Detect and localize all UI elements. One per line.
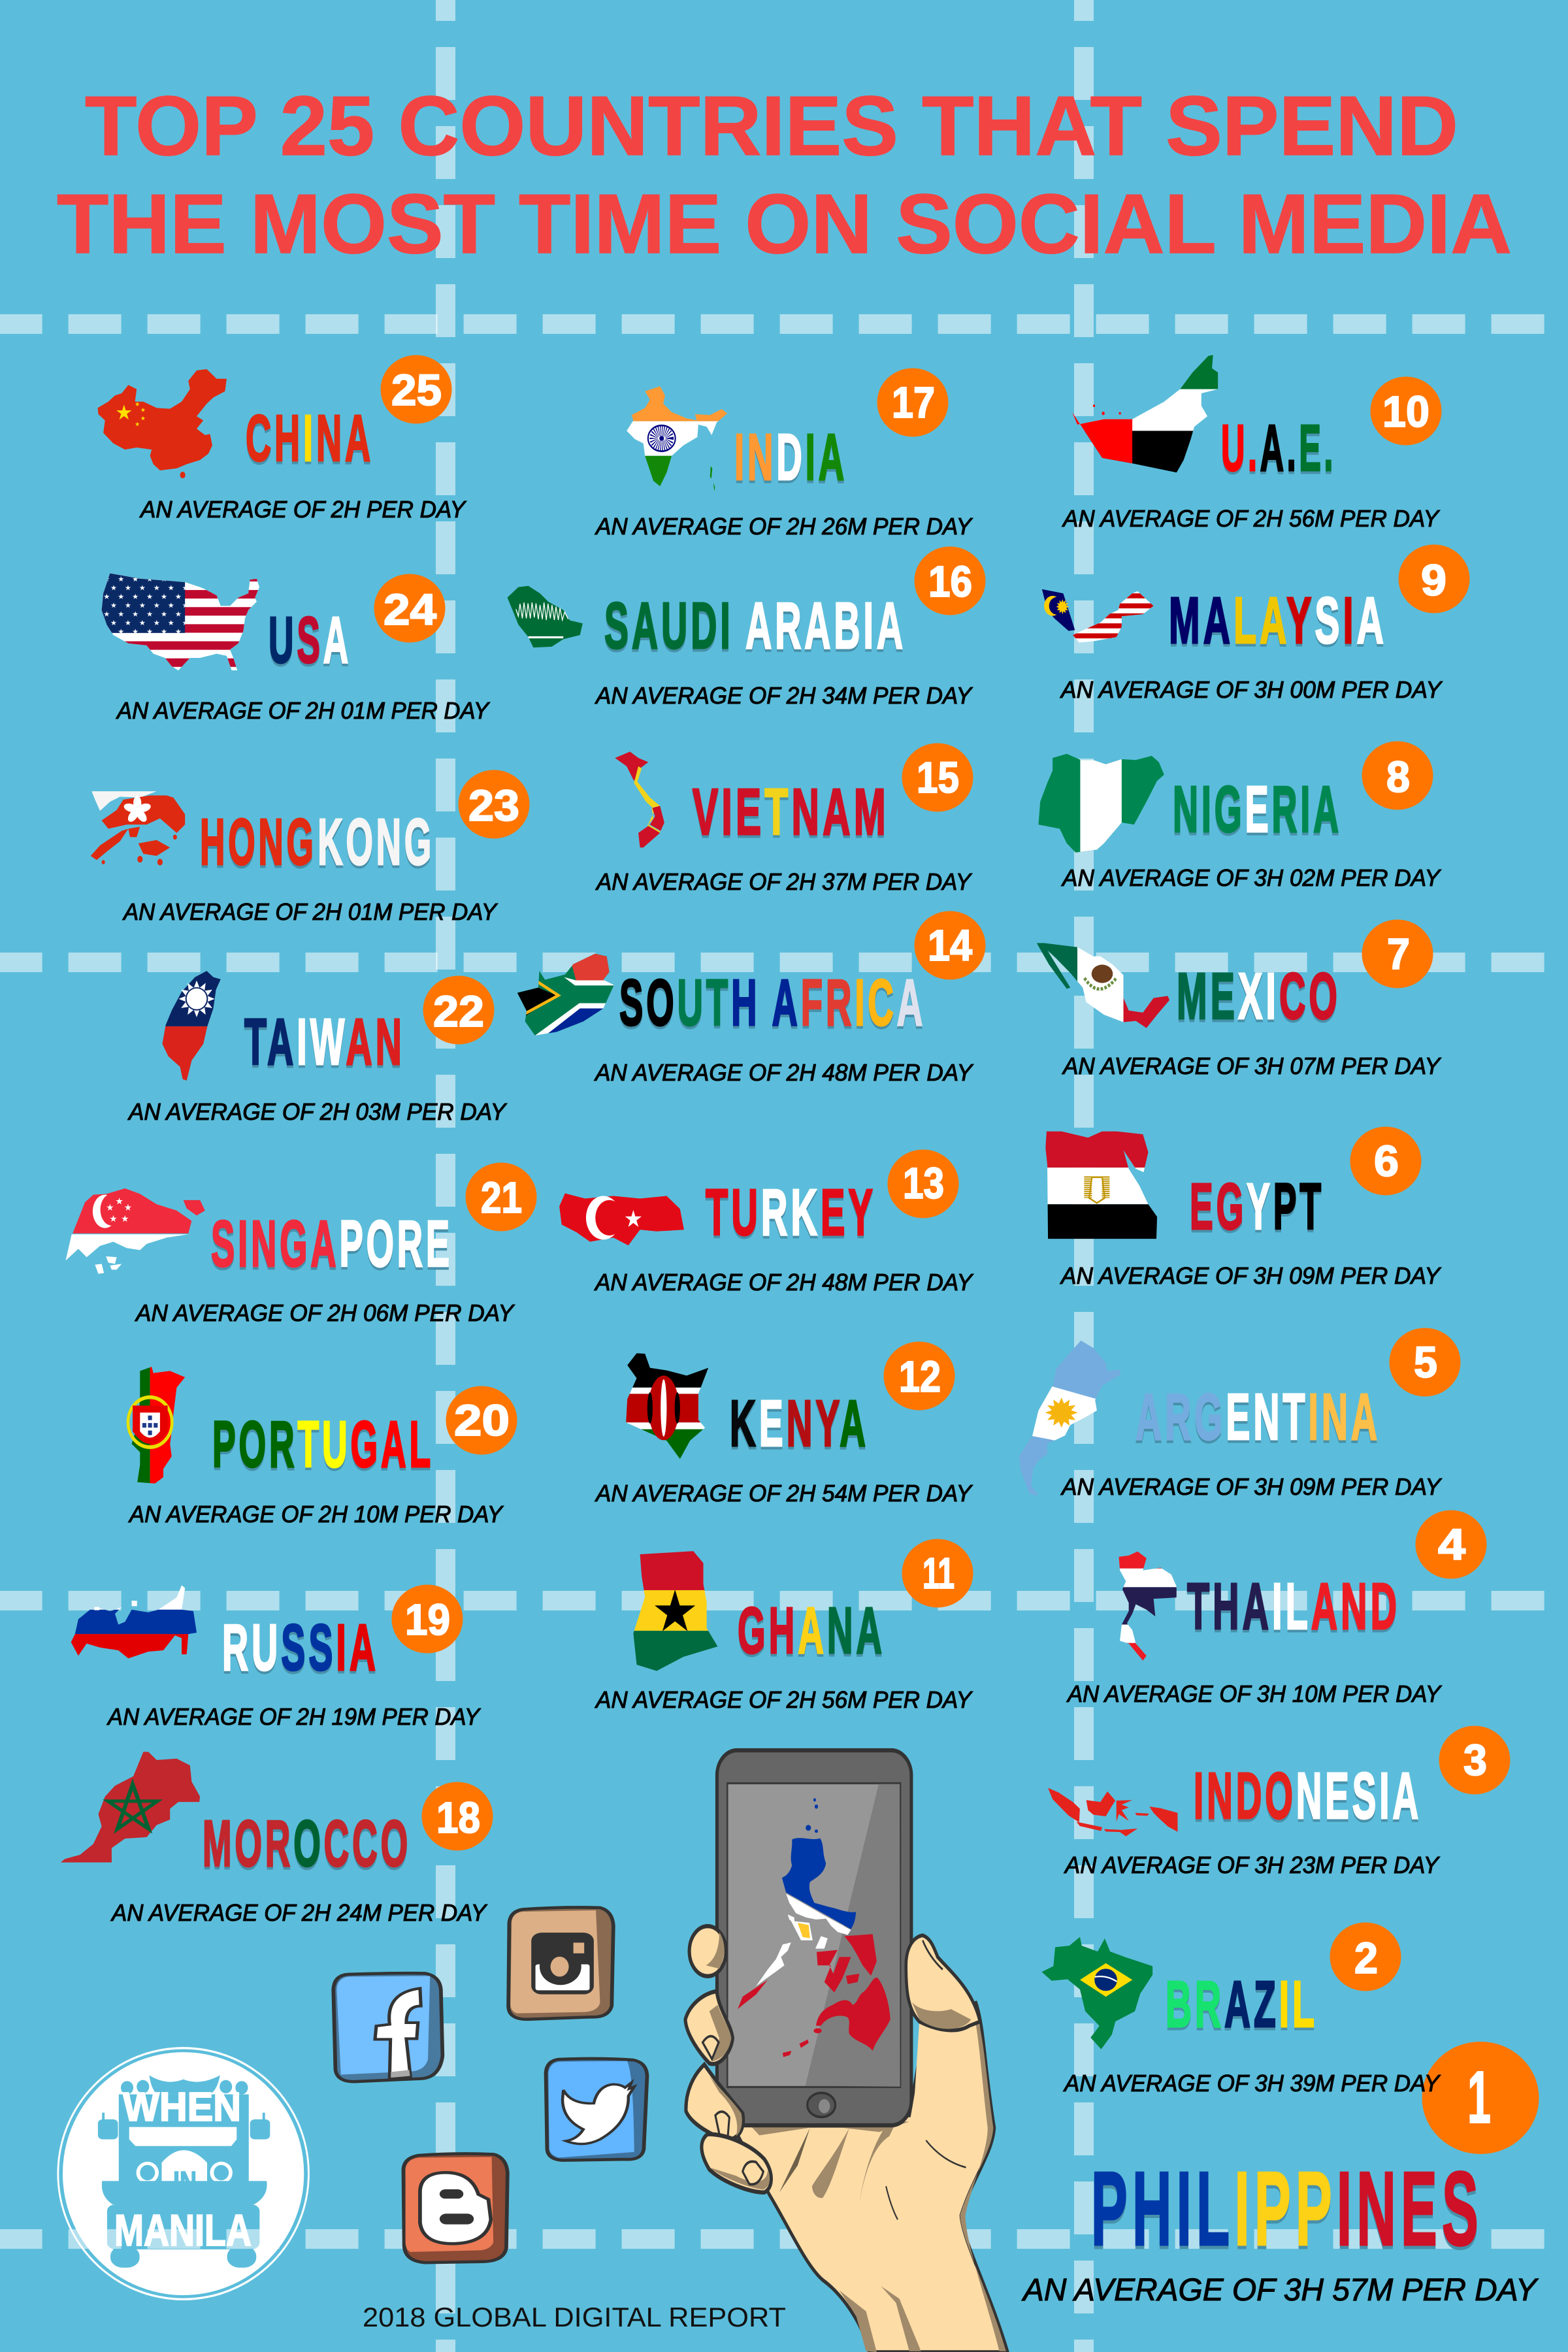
average: Portugal: AN AVERAGE OF 2H 10M PER DAY <box>128 1501 504 1527</box>
badge: 4 <box>1415 1511 1487 1578</box>
badge: 23 <box>459 770 529 839</box>
badge: 11 <box>902 1539 973 1607</box>
average: Saudi Arabia: AN AVERAGE OF 2H 34M PER DAY <box>595 682 973 709</box>
badge: 22: 22 <box>433 987 484 1036</box>
badge: 6: 6 <box>1374 1137 1399 1186</box>
badge: 3: 3 <box>1463 1736 1487 1785</box>
average: Vietnam: AN AVERAGE OF 2H 37M PER DAY <box>595 868 973 895</box>
logo: When In Manila: MANILA <box>114 2206 252 2255</box>
average: Taiwan: AN AVERAGE OF 2H 03M PER DAY <box>127 1098 508 1125</box>
map: Malaysia <box>1042 589 1155 645</box>
name: South Africa: SOUTH AFRICA <box>619 966 926 1039</box>
hand holding phone <box>685 1750 1007 2352</box>
average: Ghana: AN AVERAGE OF 2H 56M PER DAY <box>595 1686 973 1713</box>
map: Singapore <box>66 1188 205 1274</box>
badge: 9: 9 <box>1421 556 1446 605</box>
map: India <box>625 385 728 491</box>
badge: 1 <box>1422 2042 1539 2154</box>
average: Hong Kong: AN AVERAGE OF 2H 01M PER DAY <box>122 898 498 925</box>
entry: Russia <box>69 1584 482 1730</box>
map: Turkey <box>559 1194 684 1245</box>
map: Vietnam <box>615 752 664 847</box>
icon: Instagram <box>508 1907 613 2019</box>
logo: When In Manila <box>57 2047 310 2300</box>
map: Indonesia <box>1048 1788 1177 1837</box>
name: Indonesia: INDONESIA <box>1194 1759 1422 1833</box>
badge: 15 <box>902 743 973 811</box>
entry: USA <box>100 570 491 724</box>
map: Portugal <box>128 1365 187 1486</box>
name: Thailand: THAILAND <box>1187 1570 1400 1643</box>
badge: 15: 15 <box>917 753 959 802</box>
average: Morocco: AN AVERAGE OF 2H 24M PER DAY <box>110 1899 488 1926</box>
name: Vietnam: VIETNAM <box>693 776 889 849</box>
name: Singapore: SINGAPORE <box>211 1207 453 1281</box>
map: Thailand <box>1117 1550 1179 1662</box>
name: Egypt: EGYPT <box>1190 1170 1324 1243</box>
hand: finger 3 <box>686 2065 743 2140</box>
badge: 22 <box>423 976 494 1044</box>
average: Indonesia: AN AVERAGE OF 3H 23M PER DAY <box>1064 1852 1441 1878</box>
entry: Egypt <box>1044 1126 1442 1289</box>
badge: 5 <box>1389 1328 1461 1397</box>
map: Hong Kong <box>91 791 185 866</box>
icon: Blogger <box>403 2153 508 2262</box>
badge: 21 <box>465 1163 537 1231</box>
entry: Argentina <box>1017 1328 1461 1500</box>
badge: 2: 2 <box>1354 1934 1378 1983</box>
entry: Taiwan <box>127 969 508 1125</box>
phone home button <box>808 2093 836 2117</box>
footer source: 2018 GLOBAL DIGITAL REPORT <box>363 2302 786 2332</box>
entry: Brazil <box>1041 1922 1441 2097</box>
logo: When In Manila: WHEN <box>123 2085 241 2130</box>
badge: 11: 11 <box>923 1549 955 1598</box>
average: USA: AN AVERAGE OF 2H 01M PER DAY <box>116 697 491 724</box>
entry: UAE <box>1062 351 1441 532</box>
badge: 24: 24 <box>384 585 436 634</box>
hand: thumb <box>906 1935 980 2115</box>
map: Morocco <box>61 1752 200 1863</box>
entry: Indonesia <box>1048 1726 1511 1878</box>
phone <box>717 1750 911 2125</box>
badge: 8: 8 <box>1386 753 1410 802</box>
badge: 25: 25 <box>391 366 442 415</box>
map: Taiwan <box>162 971 221 1081</box>
name: Russia: RUSSIA <box>222 1611 379 1684</box>
badge: 5: 5 <box>1414 1338 1437 1387</box>
map: Brazil <box>1041 1937 1152 2050</box>
name: UAE: U.A.E. <box>1221 412 1336 485</box>
badge: 18 <box>422 1782 493 1850</box>
map: Russia <box>69 1584 199 1659</box>
badge: 4: 4 <box>1438 1520 1465 1569</box>
name: Malaysia: MALAYSIA <box>1169 584 1387 657</box>
badge: 3 <box>1439 1726 1511 1794</box>
badge: 9 <box>1398 545 1470 613</box>
name: Hong Kong: HONGKONG <box>200 806 434 879</box>
badge: 1: 1 <box>1467 2056 1491 2138</box>
badge: 13 <box>887 1150 959 1218</box>
badge: 16 <box>915 546 985 615</box>
badge: 21: 21 <box>481 1173 522 1222</box>
map: Nigeria <box>1037 752 1166 856</box>
entry: Turkey <box>559 1150 974 1296</box>
badge: 17 <box>877 368 949 436</box>
hand: finger 4 <box>702 2134 771 2193</box>
badge: 7: 7 <box>1387 930 1410 979</box>
badge: 20 <box>446 1386 517 1454</box>
badge: 19 <box>392 1585 463 1653</box>
badge: 18: 18 <box>436 1793 480 1842</box>
map: China <box>97 369 227 478</box>
badge: 24 <box>374 574 446 643</box>
entry: Saudi Arabia <box>508 546 985 709</box>
average: Kenya: AN AVERAGE OF 2H 54M PER DAY <box>595 1480 973 1507</box>
entry: Thailand <box>1066 1511 1487 1707</box>
badge: 14 <box>915 911 985 980</box>
average: South Africa: AN AVERAGE OF 2H 48M PER DAY <box>594 1059 974 1086</box>
logo: When In Manila: IN <box>173 2165 197 2199</box>
average: UAE: AN AVERAGE OF 2H 56M PER DAY <box>1062 505 1441 532</box>
average: Thailand: AN AVERAGE OF 3H 10M PER DAY <box>1066 1680 1443 1707</box>
name: Mexico: MEXICO <box>1177 960 1341 1033</box>
entry: Nigeria <box>1037 741 1442 891</box>
name: Kenya: KENYA <box>730 1387 869 1460</box>
badge: 20: 20 <box>454 1396 510 1445</box>
entry: Vietnam <box>595 743 973 895</box>
badge: 13: 13 <box>903 1159 944 1208</box>
entry: Mexico <box>1035 920 1442 1079</box>
badge: 16: 16 <box>928 557 972 606</box>
entry: Kenya <box>595 1342 973 1507</box>
entry: Philippines <box>1021 2042 1539 2308</box>
name: Argentina: ARGENTINA <box>1135 1380 1380 1454</box>
map: Philippines <box>738 1798 890 2057</box>
name: USA: USA <box>269 604 351 677</box>
name: Ghana: GHANA <box>738 1594 885 1667</box>
average: Singapore: AN AVERAGE OF 2H 06M PER DAY <box>135 1299 515 1326</box>
hand: palm <box>729 2001 1007 2352</box>
badge: 23: 23 <box>468 781 519 830</box>
badge: 25 <box>380 355 452 423</box>
badge: 12: 12 <box>899 1352 941 1401</box>
entry: China <box>97 355 467 523</box>
entry: Morocco <box>61 1752 493 1926</box>
icon: Facebook <box>333 1973 442 2082</box>
entry: Ghana <box>595 1539 973 1713</box>
badge: 6 <box>1350 1126 1422 1196</box>
map: USA <box>100 570 262 675</box>
badge: 14: 14 <box>928 921 972 970</box>
average: Argentina: AN AVERAGE OF 3H 09M PER DAY <box>1060 1473 1443 1500</box>
entry: South Africa <box>515 911 985 1086</box>
map: UAE <box>1070 351 1221 474</box>
badge: 2 <box>1330 1922 1401 1991</box>
map: Kenya <box>623 1350 710 1460</box>
average: India: AN AVERAGE OF 2H 26M PER DAY <box>595 513 973 540</box>
average: Egypt: AN AVERAGE OF 3H 09M PER DAY <box>1060 1262 1442 1289</box>
name: Morocco: MOROCCO <box>203 1807 411 1880</box>
entry: Malaysia <box>1042 545 1470 703</box>
badge: 17: 17 <box>892 378 935 427</box>
entry: Hong Kong <box>91 770 529 925</box>
title: TOP 25 COUNTRIES THAT SPEND <box>85 79 1458 173</box>
name: Saudi Arabia: SAUDI ARABIA <box>604 589 906 662</box>
name: Taiwan: TAIWAN <box>244 1005 405 1079</box>
entry: Portugal <box>128 1365 517 1527</box>
entry: Singapore <box>66 1163 536 1326</box>
title: THE MOST TIME ON SOCIAL MEDIA <box>57 177 1512 271</box>
badge: 8 <box>1362 741 1433 810</box>
map: Ghana <box>632 1549 719 1673</box>
name: Turkey: TURKEY <box>706 1176 876 1249</box>
badge: 12 <box>883 1342 955 1410</box>
map: Egypt <box>1044 1129 1159 1239</box>
badge: 19: 19 <box>405 1595 450 1644</box>
hand: finger 2 <box>685 1991 732 2064</box>
average: Mexico: AN AVERAGE OF 3H 07M PER DAY <box>1062 1053 1442 1079</box>
name: Nigeria: NIGERIA <box>1173 773 1342 846</box>
name: China: CHINA <box>246 402 374 475</box>
hand: finger 1 <box>689 1926 726 1976</box>
badge: 10 <box>1371 376 1441 446</box>
phone screen <box>727 1783 900 2087</box>
title <box>57 79 1512 271</box>
map: Mexico <box>1035 939 1171 1029</box>
badge: 7 <box>1362 920 1433 988</box>
name: Portugal: PORTUGAL <box>212 1408 434 1481</box>
name: Brazil: BRAZIL <box>1166 1968 1318 2041</box>
badge: 10: 10 <box>1382 387 1429 436</box>
average: Russia: AN AVERAGE OF 2H 19M PER DAY <box>106 1703 482 1730</box>
average: Brazil: AN AVERAGE OF 3H 39M PER DAY <box>1063 2070 1441 2097</box>
entry: India <box>595 368 973 540</box>
map: Saudi Arabia <box>508 586 583 647</box>
average: China: AN AVERAGE OF 2H PER DAY <box>139 496 467 523</box>
name: India: INDIA <box>734 421 847 494</box>
icon: Twitter <box>546 2059 647 2161</box>
map: South Africa <box>515 946 617 1042</box>
average: Philippines: AN AVERAGE OF 3H 57M PER DAY <box>1021 2273 1539 2308</box>
average: Nigeria: AN AVERAGE OF 3H 02M PER DAY <box>1061 864 1442 891</box>
average: Turkey: AN AVERAGE OF 2H 48M PER DAY <box>594 1269 974 1296</box>
average: Malaysia: AN AVERAGE OF 3H 00M PER DAY <box>1060 676 1443 703</box>
map: Argentina <box>1017 1337 1122 1498</box>
